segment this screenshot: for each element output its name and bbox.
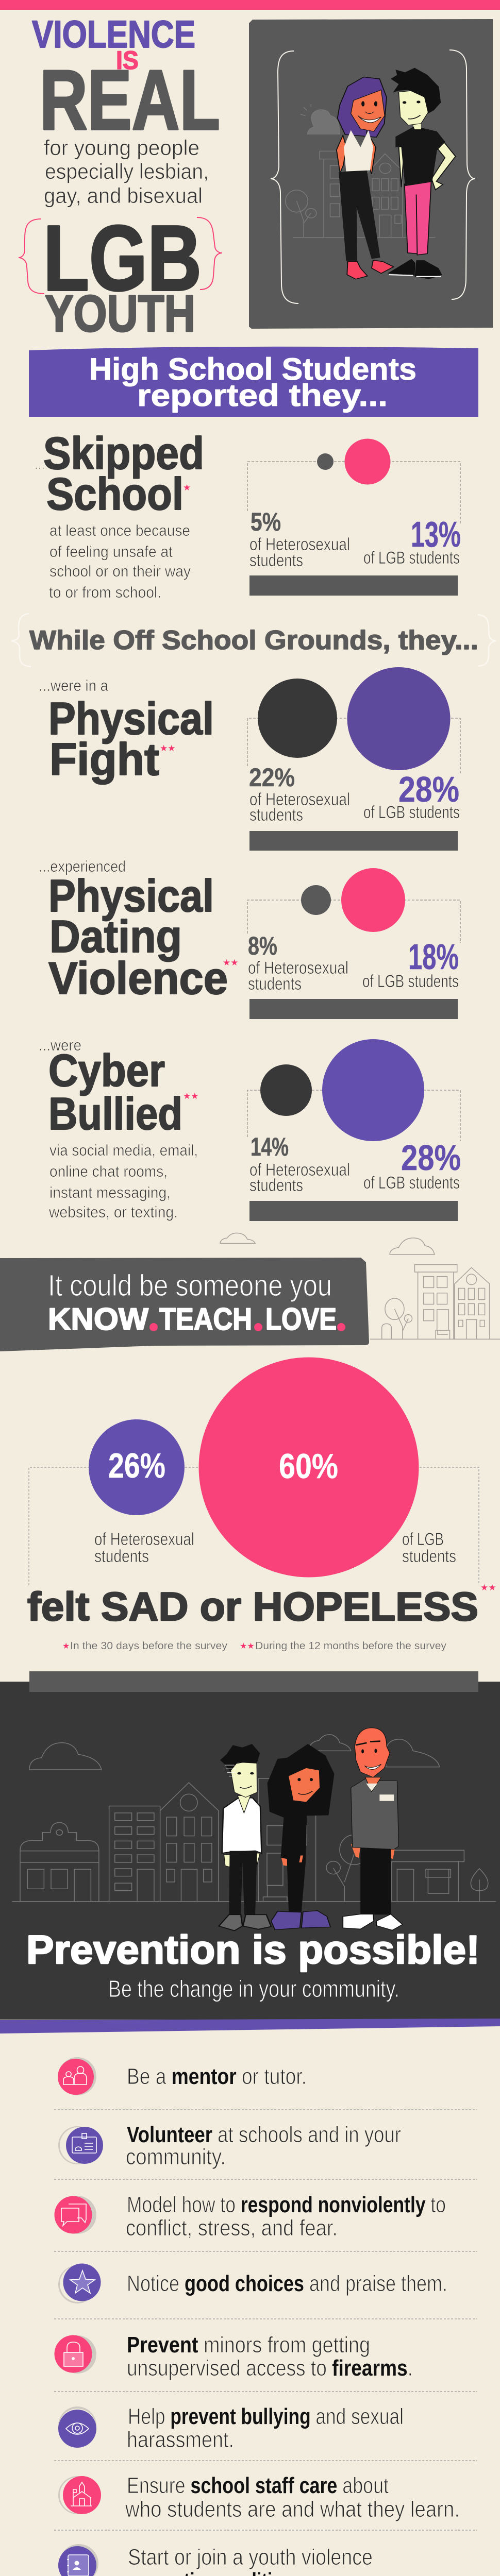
banner: it could be someone you know teach love: TEACH [159, 1302, 252, 1336]
bubble chart: physical fight: students [249, 805, 303, 825]
cyber bullied description: via social media, email, [49, 1141, 198, 1159]
intro text: especially lesbian, [45, 159, 209, 183]
icon: star [58, 2264, 101, 2303]
heading: skipped school: ★ [183, 483, 191, 493]
heading: physical dating violence: Violence [48, 953, 228, 1004]
item: school staff care [58, 2473, 460, 2522]
heading: skipped school: ... [35, 458, 45, 472]
heading: cyber bullied: Cyber [48, 1045, 165, 1096]
item: school staff care: who students are and what they learn. [125, 2497, 460, 2522]
heading: physical fight [39, 676, 214, 785]
heading: physical fight: Physical [48, 693, 214, 744]
heading: cyber bullied: ★★ [183, 1091, 198, 1101]
item: prevent bullying: harassment. [127, 2427, 234, 2452]
bubble chart: physical fight: 28% [398, 769, 459, 809]
skipped school description: at least once because [49, 521, 190, 539]
heading: physical dating violence: ...experienced [39, 857, 126, 875]
bubble chart: physical dating violence: of Heterosexual [248, 958, 348, 978]
heading: skipped school [35, 428, 204, 519]
item: school staff care: Ensure school staff care about [127, 2473, 389, 2498]
heading: physical fight: ★★ [160, 743, 175, 754]
heading: physical fight: Fight [49, 734, 159, 785]
action list [54, 2057, 477, 2576]
bubble chart: physical dating violence: 18% [408, 937, 459, 977]
bubble chart: physical dating violence: 8% [248, 931, 277, 960]
item: mentor [58, 2057, 307, 2095]
bubble chart: skipped school: of Heterosexual [249, 535, 350, 554]
item: prevent firearms [55, 2332, 413, 2381]
line art: clouds and school buildings [220, 1233, 500, 1339]
icon: eye [58, 2406, 96, 2448]
footnotes: During the 12 months before the survey [255, 1640, 446, 1652]
heading: physical fight: ...were in a [39, 676, 109, 694]
item: prevent firearms: Prevent minors from getting [127, 2332, 370, 2358]
bubble chart: cyber bullied: of Heterosexual [249, 1160, 350, 1180]
bubble chart: physical dating violence: of LGB students [362, 972, 459, 991]
label: LGB students: of LGB [402, 1530, 444, 1549]
title: violence: VIOLENCE [32, 13, 195, 56]
stat block: cyber bullied [39, 1036, 461, 1221]
footnotes [62, 1640, 446, 1652]
item: good choices: Notice good choices and praise them. [127, 2271, 447, 2296]
banner: it could be someone you know teach love: It could be someone you [48, 1269, 332, 1302]
bubble chart: physical fight: 22% [249, 763, 295, 792]
label: heterosexual students [94, 1530, 194, 1566]
cyber bullied description: instant messaging, [49, 1183, 171, 1201]
character: girl with long black hair [268, 1744, 335, 1930]
stat block: physical dating violence [39, 857, 460, 1019]
item: prevention coalition: Start or join a youth violence [128, 2545, 373, 2570]
intro text [44, 135, 209, 208]
heading: while off school grounds [11, 614, 496, 667]
bubble chart: physical dating violence: students [248, 974, 302, 994]
panel: prevention section [0, 1671, 500, 2033]
skipped school description [49, 521, 191, 601]
heading: physical dating violence: ★★ [223, 958, 238, 968]
item: prevention coalition [58, 2544, 373, 2576]
icon: schoolhouse [58, 2476, 101, 2514]
subheading: be the change: Be the change in your community. [108, 1975, 399, 2002]
heading: prevention is possible: Prevention is possible! [26, 1927, 480, 1972]
bubble chart: cyber bullied [247, 1039, 461, 1221]
icon: id badge [58, 2126, 103, 2164]
heading: physical dating violence [39, 857, 238, 1004]
character: bald man in grey sweater [343, 1728, 403, 1930]
footnotes: In the 30 days before the survey [70, 1640, 227, 1652]
title: youth: YOUTH [45, 285, 195, 343]
bubble chart: physical fight: of Heterosexual [249, 790, 350, 809]
footnotes: ★★ [240, 1641, 255, 1651]
cyber bullied description: websites, or texting. [48, 1203, 178, 1221]
bubble chart: physical fight: of LGB students [363, 803, 460, 822]
item: respond nonviolently [55, 2192, 446, 2241]
banner: it could be someone you know teach love: KNOW [48, 1302, 148, 1336]
top pink bar [0, 0, 500, 10]
banner: high school students reported they [29, 347, 478, 417]
bubble: heterosexual students 26 percent: 26% [108, 1446, 165, 1485]
title: real: REAL [40, 53, 220, 147]
item: volunteer [58, 2122, 401, 2170]
background school line art [286, 104, 436, 238]
banner: it could be someone you know teach love: LOVE [265, 1302, 337, 1336]
banner: it could be someone you know teach love [0, 1258, 369, 1351]
item: respond nonviolently: Model how to respond nonviolently to [127, 2192, 446, 2217]
item: prevent firearms: unsupervised access to firearms. [127, 2355, 413, 2381]
heading: skipped school: Skipped [43, 428, 204, 479]
heading: felt sad or hopeless: ★★ [480, 1583, 496, 1593]
heading: felt sad or hopeless: felt SAD or HOPELESS [27, 1584, 478, 1629]
item: volunteer: community. [126, 2144, 226, 2170]
item: respond nonviolently: conflict, stress, and fear. [126, 2215, 338, 2241]
skipped school description: to or from school. [49, 583, 161, 601]
bubble chart: cyber bullied: of LGB students [363, 1173, 460, 1193]
heading: cyber bullied [39, 1036, 198, 1139]
bubble: LGB students 60 percent: 60% [279, 1447, 338, 1486]
panel: two students illustration [249, 19, 493, 329]
bubble chart: physical fight [247, 667, 460, 851]
label: heterosexual students: of Heterosexual [94, 1530, 194, 1549]
heading: cyber bullied: ...were [39, 1036, 81, 1054]
heading: while off school grounds: While Off School Grounds, they... [29, 625, 478, 655]
heading: physical dating violence: Dating [49, 911, 182, 962]
icon: padlock [55, 2335, 96, 2374]
cyber bullied description [48, 1141, 198, 1221]
pink brackets and LGB heading: LGB [43, 207, 202, 310]
cyber bullied description: online chat rooms, [49, 1162, 168, 1180]
bubble chart: cyber bullied: students [249, 1176, 303, 1195]
bubble chart: skipped school: students [249, 551, 303, 570]
label: heterosexual students: students [94, 1547, 149, 1566]
white brackets [271, 50, 475, 303]
title block [19, 13, 222, 343]
bubble chart: cyber bullied: 28% [401, 1138, 461, 1178]
skipped school description: of feeling unsafe at [49, 543, 173, 561]
banner: high school students reported they: reported they... [137, 378, 388, 413]
item: prevent bullying [58, 2404, 404, 2452]
icon: mentor people [58, 2057, 96, 2095]
label: LGB students [402, 1530, 456, 1566]
item: prevent bullying: Help prevent bullying and sexual [128, 2404, 404, 2429]
item: mentor: Be a mentor or tutor. [127, 2064, 307, 2089]
heading: skipped school: School [46, 468, 184, 519]
bubble chart: cyber bullied: 14% [251, 1132, 289, 1161]
title: is: IS [116, 46, 139, 75]
bubble: heterosexual students 26 percent [89, 1419, 185, 1515]
line art: neighborhood [12, 1735, 496, 1902]
icon: speech bubbles [55, 2196, 96, 2234]
bubble chart: skipped school [247, 439, 461, 596]
bubble chart: felt sad or hopeless [29, 1357, 479, 1585]
bubble: LGB students 60 percent [199, 1357, 419, 1578]
banner: high school students reported they: High School Students [89, 352, 416, 386]
heading: physical dating violence: Physical [48, 870, 214, 921]
bubble chart: skipped school: 5% [251, 507, 281, 536]
bubble chart: physical dating violence [247, 868, 460, 1019]
bubble chart: skipped school: 13% [411, 514, 461, 554]
item: good choices [58, 2264, 447, 2303]
character: young man in white shirt [219, 1744, 271, 1930]
footnotes: ★ [62, 1641, 70, 1651]
stat block: skipped school [35, 428, 461, 601]
intro text: gay, and bisexual [44, 183, 203, 208]
heading: cyber bullied: Bullied [48, 1088, 182, 1139]
stat block: physical fight [39, 667, 460, 851]
intro text: for young people [44, 135, 199, 160]
character: boy with black hair [388, 68, 456, 279]
label: LGB students: students [402, 1547, 456, 1566]
item: volunteer: Volunteer at schools and in your [127, 2122, 401, 2147]
icon: address book [58, 2544, 98, 2576]
skipped school description: school or on their way [49, 562, 191, 580]
character: girl with purple hair [337, 77, 394, 279]
bubble chart: skipped school: of LGB students [363, 548, 460, 568]
